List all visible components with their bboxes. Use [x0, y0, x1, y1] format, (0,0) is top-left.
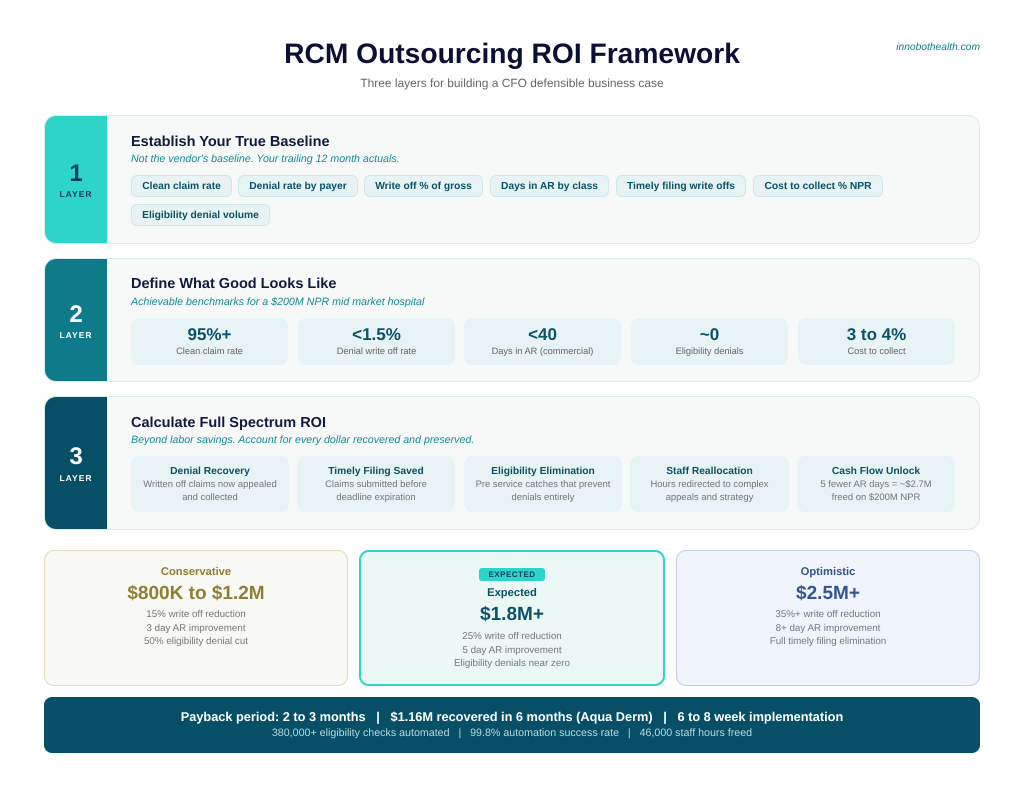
layer 3 badge: LAYER — [59, 473, 93, 483]
scenario: conservative: Conservative — [161, 566, 231, 578]
scenario: expected: Eligibility denials near zero — [454, 658, 570, 669]
ROI components — [131, 456, 955, 512]
layer 3 badge: 3 — [69, 443, 83, 470]
baseline metric chips: Timely filing write offs — [627, 181, 735, 192]
layer 1 heading: Establish Your True Baseline — [131, 134, 330, 150]
ROI components: freed on $200M NPR — [832, 492, 920, 503]
expected badge: EXPECTED — [488, 570, 536, 579]
summary bar — [44, 697, 980, 753]
benchmark stats: 3 to 4% — [847, 325, 906, 344]
ROI components: Staff Reallocation — [666, 466, 753, 477]
benchmark stats: ~0 — [700, 325, 719, 344]
benchmark stats: Cost to collect — [847, 346, 906, 356]
benchmark stats: Days in AR (commercial) — [492, 346, 593, 356]
benchmark stats: Eligibility denials — [676, 346, 743, 356]
ROI components: and collected — [182, 492, 238, 503]
benchmark stats: Clean claim rate — [176, 346, 243, 356]
scenario: conservative: 50% eligibility denial cut — [144, 636, 248, 647]
ROI components: 5 fewer AR days = ~$2.7M — [820, 479, 932, 490]
scenario: conservative: 3 day AR improvement — [146, 623, 246, 634]
title: RCM Outsourcing ROI Framework — [284, 37, 740, 69]
benchmark stats: <1.5% — [352, 325, 401, 344]
layer 3 heading: Calculate Full Spectrum ROI — [131, 414, 326, 430]
source link: innobothealth.com — [896, 42, 980, 53]
ROI components: deadline expiration — [336, 492, 416, 503]
scenario: conservative — [44, 550, 348, 686]
ROI components: Written off claims now appealed — [143, 479, 277, 490]
layer 2 heading: Define What Good Looks Like — [131, 276, 336, 292]
layer 2 subheading: Achievable benchmarks for a $200M NPR mid market hospital — [131, 296, 424, 308]
layer 1 badge: LAYER — [59, 189, 93, 199]
benchmark stats — [131, 318, 955, 365]
layer 2 badge: LAYER — [59, 330, 93, 340]
panel: layer 1 baseline — [44, 115, 980, 244]
scenario: optimistic: $2.5M+ — [796, 583, 860, 604]
ROI components: Claims submitted before — [325, 479, 427, 490]
scenario: expected: 25% write off reduction — [462, 631, 562, 642]
benchmark stats: Denial write off rate — [337, 346, 416, 356]
ROI components: Hours redirected to complex — [650, 479, 769, 490]
baseline metric chips: Denial rate by payer — [249, 181, 347, 192]
scenario: optimistic — [676, 550, 980, 686]
baseline metric chips: Cost to collect % NPR — [764, 181, 872, 192]
benchmark stats: <40 — [528, 325, 557, 344]
ROI components: Cash Flow Unlock — [832, 466, 920, 477]
baseline metric chips: Clean claim rate — [142, 181, 221, 192]
scenario: expected: 5 day AR improvement — [462, 645, 562, 656]
layer 2 badge: 2 — [69, 301, 83, 328]
layer 3 badge — [45, 397, 107, 529]
ROI components: appeals and strategy — [666, 492, 753, 503]
baseline metric chips: Write off % of gross — [375, 181, 472, 192]
scenario: optimistic: Optimistic — [801, 566, 855, 578]
scenario: conservative: $800K to $1.2M — [127, 583, 265, 604]
scenario: optimistic: Full timely filing elimination — [770, 636, 886, 647]
panel: layer 3 ROI — [44, 396, 980, 530]
scenario: optimistic: 8+ day AR improvement — [776, 623, 880, 634]
scenario: expected: $1.8M+ — [480, 604, 544, 625]
layer 1 subheading: Not the vendor's baseline. Your trailing 12 month actuals. — [131, 153, 400, 165]
scenario: expected: Expected — [487, 587, 537, 599]
layer 1 badge: 1 — [69, 160, 83, 187]
scenario: expected — [359, 550, 665, 686]
benchmark stats: 95%+ — [188, 325, 231, 344]
scenario: optimistic: 35%+ write off reduction — [775, 609, 881, 620]
ROI components: Denial Recovery — [170, 466, 250, 477]
expected badge — [479, 568, 545, 581]
scenario: conservative: 15% write off reduction — [146, 609, 246, 620]
ROI components: Eligibility Elimination — [491, 466, 595, 477]
baseline metric chips: Eligibility denial volume — [142, 210, 259, 221]
ROI components: Pre service catches that prevent — [476, 479, 610, 490]
layer 3 subheading: Beyond labor savings. Account for every dollar recovered and preserved. — [131, 434, 474, 446]
panel: layer 2 benchmarks — [44, 258, 980, 382]
ROI components: Timely Filing Saved — [328, 466, 424, 477]
subtitle: Three layers for building a CFO defensible business case — [360, 76, 664, 90]
ROI components: denials entirely — [512, 492, 574, 503]
layer 1 badge — [45, 116, 107, 243]
layer 2 badge — [45, 259, 107, 381]
baseline metric chips — [131, 175, 883, 226]
baseline metric chips: Days in AR by class — [501, 181, 598, 192]
summary detail: 380,000+ eligibility checks automated | 99.8% automation success rate | 46,000 staff hours freed — [272, 727, 752, 739]
summary headline: Payback period: 2 to 3 months | $1.16M recovered in 6 months (Aqua Derm) | 6 to 8 week implementation — [181, 709, 843, 724]
